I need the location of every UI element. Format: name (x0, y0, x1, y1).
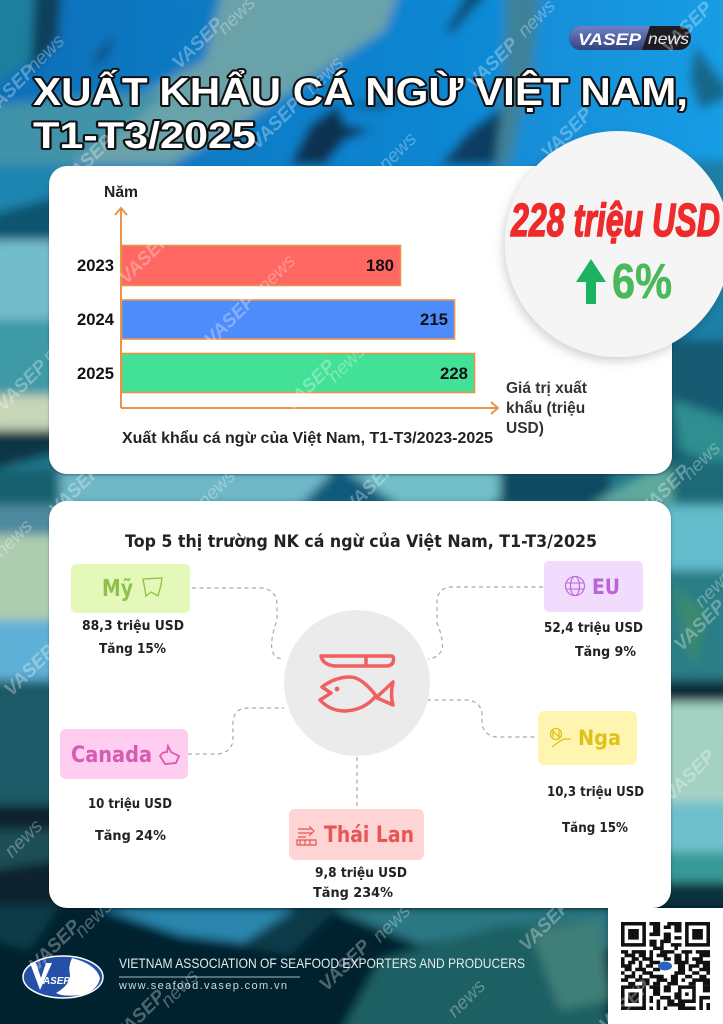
watermarks: news (375, 128, 421, 175)
market: Canada: Tăng 24% (95, 828, 166, 844)
watermarks: VASEP (315, 936, 375, 995)
watermarks: news (1, 815, 47, 862)
watermarks: VASEP (537, 104, 597, 163)
market: EU: 52,4 triệu USD (544, 620, 643, 636)
bar: 2025: 228 (440, 365, 468, 383)
right strip bands (665, 340, 723, 460)
axis label: value: Giá trị xuất (506, 380, 587, 397)
market: Mỹ: 88,3 triệu USD (82, 618, 184, 634)
bar: 2024: 215 (420, 311, 448, 329)
watermarks: VASEP (246, 94, 306, 153)
bar: 2024: 2024 (77, 311, 115, 329)
footer: divider and website: www.seafood.vasep.com.vn (118, 980, 287, 992)
market: Nga: Tăng 15% (562, 820, 628, 836)
icon: knife (321, 656, 394, 666)
chart caption: Xuất khẩu cá ngừ của Việt Nam, T1-T3/2023-2025 (122, 429, 493, 447)
icon: Canada map (160, 746, 179, 764)
title (33, 69, 688, 156)
watermarks: VASEP (635, 461, 695, 520)
watermarks: news (71, 895, 117, 942)
icon: coin and trend (550, 728, 571, 747)
footer: organisation name: VIETNAM ASSOCIATION OF SEAFOOD EXPORTERS AND PRODUCERS (119, 955, 525, 971)
bar: 2025: 2025 (77, 365, 114, 383)
market: Canada (60, 729, 188, 844)
watermarks: VASEP (45, 461, 105, 520)
market: EU: Tăng 9% (575, 644, 636, 660)
market: Canada: Canada (71, 743, 152, 768)
market: Thái Lan: Tăng 234% (313, 885, 393, 901)
panel: top markets card (49, 501, 671, 908)
market: Mỹ: Mỹ (102, 576, 133, 602)
watermarks: news (302, 52, 348, 99)
watermarks: VASEP (515, 896, 575, 955)
icon: goods export (297, 826, 316, 845)
QR code (608, 908, 723, 1024)
markets heading: Top 5 thị trường NK cá ngừ của Việt Nam, T1-T3/2025 (125, 532, 597, 551)
callout: total value circle (505, 131, 723, 357)
icon: globe (566, 576, 584, 596)
watermarks: VASEP (280, 356, 340, 415)
watermarks: VASEP (168, 14, 228, 73)
middle band (60, 470, 330, 505)
market: Nga: Nga (578, 726, 621, 750)
watermarks: VASEP (200, 291, 260, 350)
chart: export value bars by year (77, 184, 587, 447)
watermarks: VASEP (0, 641, 60, 700)
axis label: value: khẩu (triệu (506, 400, 585, 417)
logo: VASEP news pill: news (648, 31, 689, 48)
connectors (188, 587, 543, 808)
watermarks: news (194, 465, 240, 512)
bar: 2024 (77, 300, 454, 339)
market: Mỹ: Tăng 15% (99, 641, 166, 657)
panel: bar chart card (49, 166, 672, 474)
logo: VASEP globe: ASEP (42, 976, 70, 987)
logo: VASEP news pill (569, 26, 691, 50)
market: EU (544, 561, 643, 660)
watermarks: VASEP (58, 131, 118, 190)
logo: VASEP news pill: VASEP (578, 30, 642, 49)
bar: 2023 (77, 246, 400, 286)
axis label: value: USD) (506, 420, 544, 437)
watermarks: news (254, 250, 300, 297)
hub circle with knife and fish icon (284, 610, 430, 756)
watermarks: VASEP (115, 229, 175, 288)
watermarks: VASEP (463, 34, 523, 93)
watermarks: news (157, 965, 203, 1012)
bar: 2023: 180 (366, 257, 394, 275)
left strip bands (0, 165, 60, 215)
icon: USA map (143, 578, 162, 596)
callout growth: 6% (612, 255, 672, 309)
watermarks: news (39, 320, 85, 367)
bar: 2023: 2023 (77, 257, 114, 275)
market: Canada: 10 triệu USD (88, 796, 172, 812)
title: XUẤT KHẨU CÁ NGỪ VIỆT NAM, (33, 69, 688, 114)
market: Thái Lan: Thái Lan (324, 823, 414, 848)
bottom band (0, 905, 723, 1024)
market: Thái Lan: 9,8 triệu USD (315, 865, 407, 881)
market: Mỹ (71, 564, 190, 657)
market: EU: EU (592, 575, 620, 599)
market: Nga (538, 711, 644, 836)
market: Thái Lan (289, 809, 424, 901)
watermarks: news (23, 30, 69, 77)
axis: vertical and horizontal arrows (115, 208, 498, 414)
axis label: year: Năm (104, 184, 138, 201)
icon: fish (320, 677, 393, 711)
watermarks: news (444, 975, 490, 1022)
title: T1-T3/2025 (33, 115, 256, 156)
watermarks: news (324, 340, 370, 387)
watermarks: VASEP (340, 458, 400, 517)
icon: green up arrow (576, 259, 606, 304)
QR centre logo (658, 962, 672, 970)
market: Nga: 10,3 triệu USD (547, 784, 644, 800)
watermarks: news (369, 900, 415, 947)
watermarks: VASEP (25, 916, 85, 975)
watermarks: VASEP (660, 746, 720, 805)
logo: VASEP globe (23, 956, 103, 998)
bar: 2025 (77, 354, 474, 392)
